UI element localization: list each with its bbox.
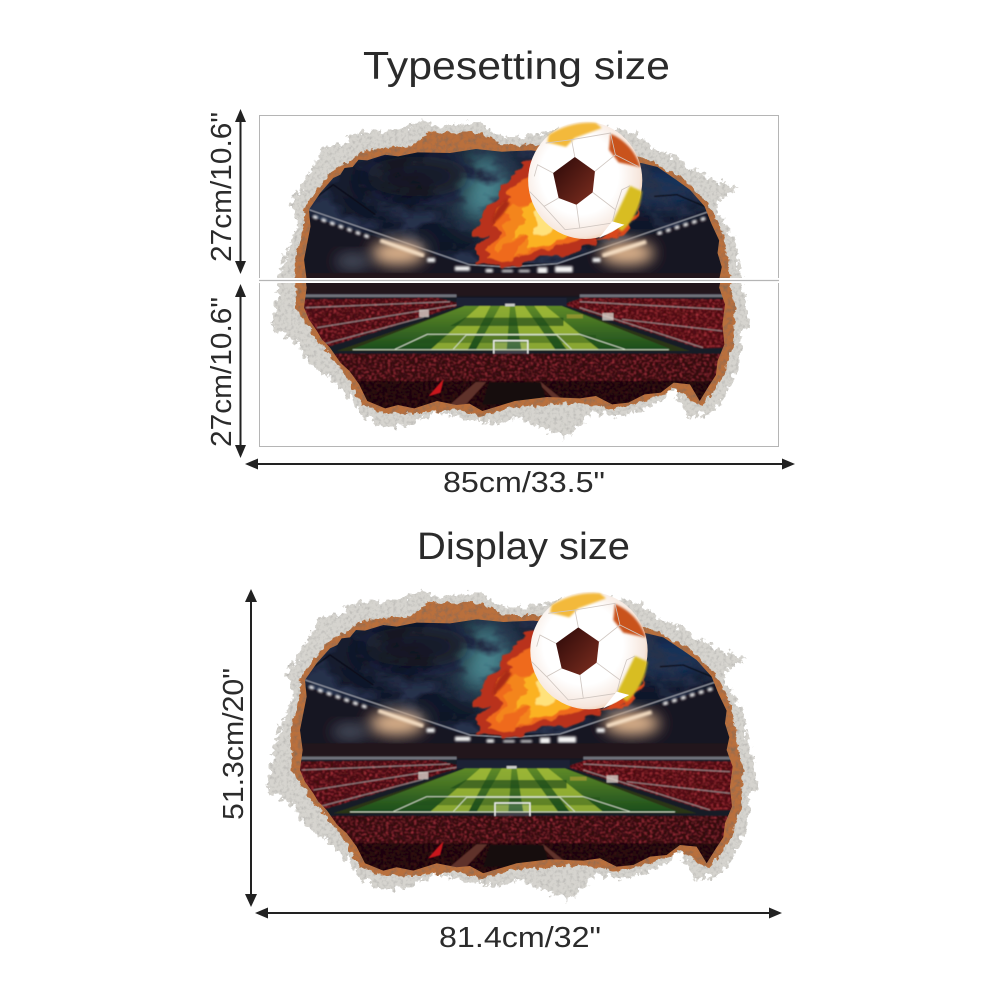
label: typesetting width: 85cm/33.5": [443, 467, 605, 499]
dimension frame: [260, 116, 778, 446]
label: display width: 81.4cm/32": [439, 922, 601, 954]
arrow: upper height: [235, 109, 246, 274]
sticker: typesetting preview, upper half: [277, 118, 745, 278]
label: lower height: 27cm/10.6": [206, 297, 238, 447]
arrow: lower height: [235, 284, 246, 458]
label: upper height: 27cm/10.6": [206, 112, 238, 262]
title: Display size: Display size: [417, 526, 630, 568]
arrow: display height: [245, 589, 257, 907]
panel split line: [259, 278, 779, 283]
sticker: display preview: [267, 591, 758, 900]
arrow: typesetting width: [245, 458, 795, 470]
title: Typesetting size: Typesetting size: [363, 45, 670, 88]
sticker: typesetting preview, lower half: [270, 283, 750, 442]
arrow: display width: [255, 908, 782, 918]
label: display height: 51.3cm/20": [218, 668, 250, 820]
